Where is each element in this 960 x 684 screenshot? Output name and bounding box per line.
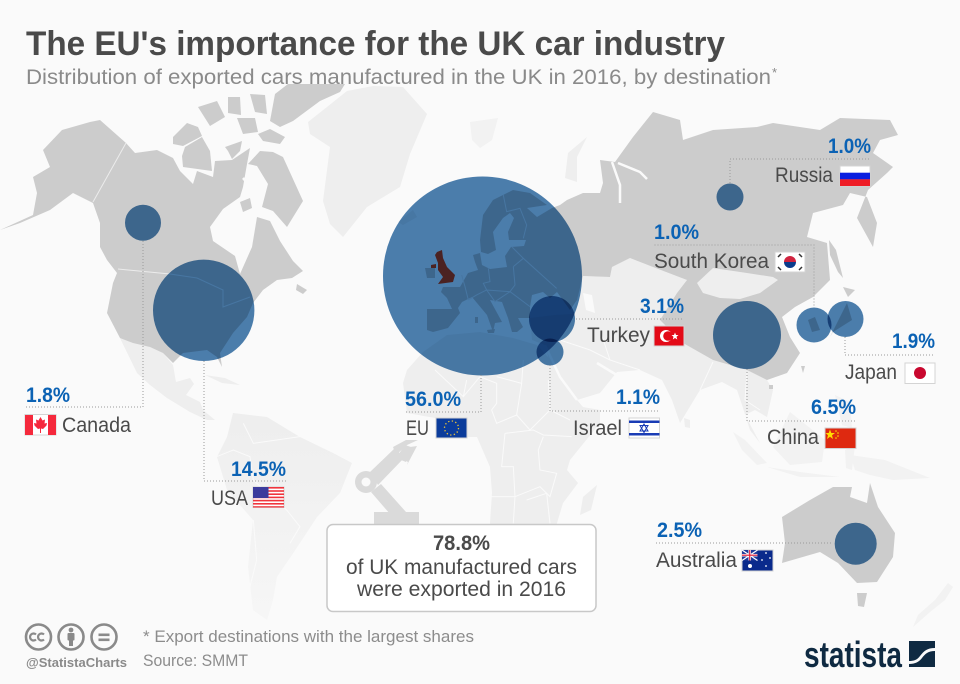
callout: Turkey	[576, 295, 684, 347]
world map	[0, 84, 953, 627]
bubble: Australia	[835, 523, 877, 565]
callout: Japan: Japan	[845, 361, 897, 384]
subtitle footnote mark: *	[772, 65, 777, 80]
bubble: Israel	[536, 338, 564, 366]
bubble: EU	[383, 176, 582, 376]
logo: statista: statista	[804, 634, 903, 675]
callout: Russia: 1.0%	[828, 135, 871, 158]
callout: Israel	[550, 365, 660, 440]
map highlight: United Kingdom	[431, 250, 455, 284]
icon: robot arm	[355, 440, 419, 525]
callout: Australia	[656, 519, 833, 572]
callout: EU: EU	[406, 417, 429, 440]
callout: Turkey: 3.1%	[640, 295, 684, 318]
callout: Turkey: Turkey	[587, 324, 650, 347]
subtitle: Distribution of exported cars manufactured in the UK in 2016, by destination	[26, 66, 771, 89]
callout: EU: 56.0%	[405, 388, 461, 411]
north america mainland	[0, 120, 303, 367]
callout: South Korea: South Korea	[654, 250, 769, 273]
callout: Canada: 1.8%	[26, 384, 70, 407]
callout: Japan	[845, 330, 935, 384]
callout: Israel: Israel	[573, 417, 622, 440]
source: Source: SMMT	[143, 651, 248, 670]
australia	[782, 483, 895, 583]
callout: Russia	[730, 135, 871, 187]
callout box: 78.8% exported: of UK manufactured cars	[346, 556, 577, 579]
callout: China	[747, 369, 856, 449]
callout: Australia: Australia	[656, 549, 737, 572]
bubble: Canada	[125, 205, 161, 241]
title: The EU's importance for the UK car industry	[26, 25, 725, 63]
country borders	[93, 143, 557, 307]
callout: Australia: 2.5%	[657, 519, 702, 542]
callout: Japan: 1.9%	[892, 330, 935, 353]
callout box: 78.8% exported: 78.8%	[433, 532, 490, 555]
callout: USA	[204, 361, 286, 510]
footnote: * Export destinations with the largest shares	[143, 627, 474, 646]
callout: USA: 14.5%	[231, 458, 286, 481]
callout box: 78.8% exported	[327, 524, 596, 612]
callout: China: 6.5%	[811, 396, 856, 419]
icon: creative commons badges	[26, 624, 116, 650]
callout: EU	[405, 375, 481, 440]
bubble: Russia	[716, 184, 744, 210]
bubble: Turkey	[529, 296, 575, 342]
bubble: China	[713, 301, 781, 369]
callout: Israel: 1.1%	[616, 386, 660, 409]
bubble: USA	[153, 260, 254, 361]
callout: South Korea	[654, 221, 814, 307]
inland seas and light patches	[697, 268, 778, 299]
callout: USA: USA	[211, 487, 248, 510]
callout: China: China	[767, 426, 819, 449]
handle: @StatistaCharts: @StatistaCharts	[26, 655, 127, 670]
callout box: 78.8% exported: were exported in 2016	[356, 578, 566, 601]
bubble: South Korea	[796, 308, 832, 342]
eurasia mainland	[427, 112, 898, 380]
callout: South Korea: 1.0%	[654, 221, 699, 244]
callout: Canada	[24, 241, 143, 437]
bubble: Japan	[828, 301, 864, 337]
callout: Russia: Russia	[775, 164, 833, 187]
callout: Canada: Canada	[62, 414, 131, 437]
